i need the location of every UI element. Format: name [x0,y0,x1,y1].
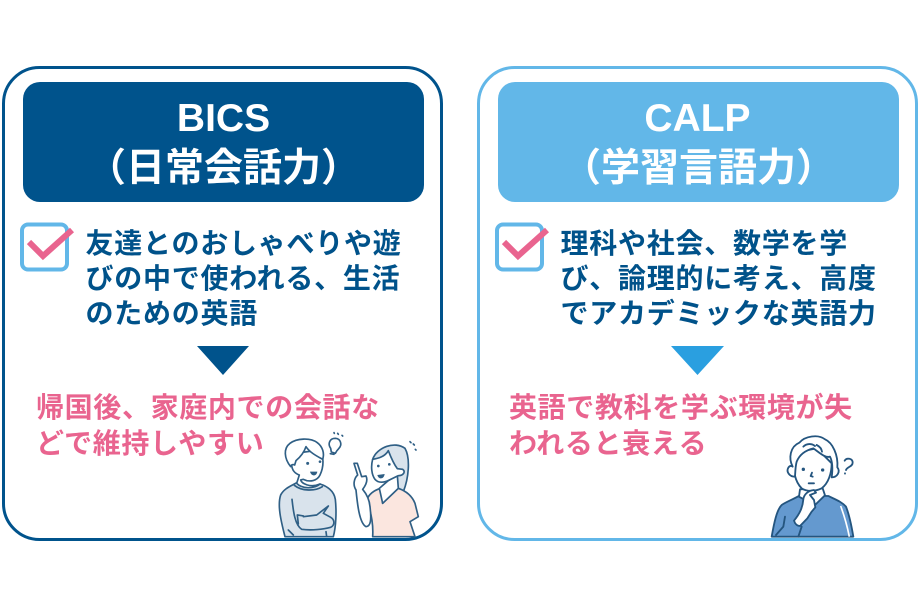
BICS outcome text: 帰国後、家庭内での会話な [36,392,380,423]
BICS description: 友達とのおしゃべりや遊 [86,228,401,259]
illustration: thinking man [772,436,853,537]
BICS description: びの中で使われる、生活 [86,263,400,294]
CALP outcome text: われると衰える [509,428,707,459]
CALP description: 理科や社会、数学を学 [560,228,848,259]
BICS outcome text: どで維持しやすい [36,428,264,459]
BICS header: BICS [177,97,270,140]
CALP description: び、論理的に考え、高度 [560,263,877,294]
man [279,439,336,537]
panel: CALP [478,68,916,540]
panel: BICS [4,68,442,540]
icon: CALP checkbox [497,224,547,270]
CALP header: （学習言語力） [562,147,835,190]
BICS header: （日常会話力） [87,147,360,190]
icon: BICS checkbox [22,224,72,270]
BICS description [86,228,401,329]
BICS header [23,82,424,202]
CALP header [498,82,899,202]
woman [354,442,418,537]
CALP outcome text [509,391,853,459]
BICS description: のための英語 [86,298,258,329]
light bulb [329,433,343,454]
illustration: two people talking [279,433,418,537]
CALP outcome text: 英語で教科を学ぶ環境が失 [509,391,853,423]
arrow: BICS down triangle [197,346,249,375]
CALP header: CALP [644,97,751,140]
CALP description: でアカデミックな英語力 [560,297,877,329]
BICS outcome text [36,392,380,459]
CALP description [560,228,877,329]
arrow: CALP down triangle [671,346,724,375]
